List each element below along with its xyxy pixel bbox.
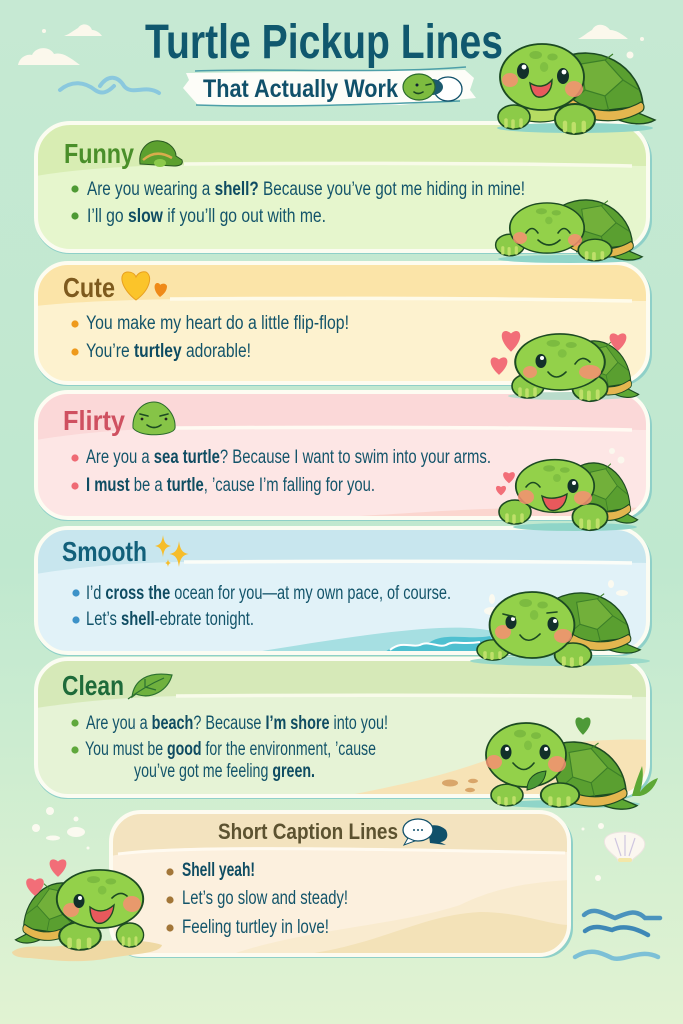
cute lines: [71, 313, 349, 362]
panel: funny: [35, 123, 652, 254]
turtle: cute, winking, with hearts: [491, 331, 639, 401]
panel: flirty: [35, 392, 652, 521]
turtle: smooth: [470, 580, 650, 667]
decorative clouds: [18, 24, 644, 65]
turtle: top happy: [497, 44, 655, 134]
funny lines: Are you wearing a shell? Because you’ve got me hiding in mine!: [87, 179, 525, 200]
short caption list: Feeling turtley in love!: [182, 917, 329, 938]
flirty lines: I must be a turtle, ’cause I’m falling for you.: [86, 475, 375, 496]
subtitle banner: That Actually Work: [203, 75, 398, 103]
heading: clean: Clean: [62, 670, 124, 701]
smooth lines: I’d cross the ocean for you—at my own pace, of course.: [86, 583, 451, 604]
decorative waves: [60, 78, 159, 93]
short caption list: Let’s go slow and steady!: [182, 888, 348, 909]
plant: [632, 766, 658, 796]
icon: small turtle with speech bubbles: [403, 74, 462, 101]
icon: seashell: [604, 832, 645, 862]
funny lines: I’ll go slow if you’ll go out with me.: [87, 206, 326, 227]
heart leaf: [575, 717, 591, 735]
funny lines: [71, 179, 525, 227]
cute lines: You’re turtley adorable!: [86, 341, 251, 362]
clean lines: you’ve got me feeling green.: [134, 761, 315, 782]
heading: funny: Funny: [64, 138, 134, 169]
heading: short caption lines: Short Caption Lines: [218, 819, 398, 844]
heading: cute: Cute: [63, 272, 115, 303]
turtle: flirty, winking: [496, 448, 638, 531]
panel: smooth: [35, 528, 652, 656]
clean lines: You must be good for the environment, ’cause: [85, 739, 376, 760]
icon: leaf: [128, 674, 172, 699]
small hearts: [496, 472, 515, 495]
cute lines: You make my heart do a little flip-flop!: [86, 313, 349, 334]
clean lines: Are you a beach? Because I’m shore into you!: [86, 713, 388, 734]
icon: speech bubbles: [403, 819, 447, 845]
panel: clean: [35, 659, 652, 799]
panel: cute: [35, 263, 652, 386]
hearts: [26, 859, 66, 896]
smooth lines: Let’s shell-ebrate tonight.: [86, 609, 254, 630]
heading: smooth: Smooth: [62, 536, 147, 567]
short caption list: [166, 860, 348, 938]
title: Turtle Pickup Lines: [145, 16, 503, 69]
icon: sparkles: [155, 535, 189, 567]
decorative dots and bubbles: [32, 807, 604, 881]
flirty lines: Are you a sea turtle? Because I want to swim into your arms.: [86, 447, 491, 468]
icon: hearts: [122, 272, 167, 300]
flirty lines: [71, 447, 491, 496]
short caption list: Shell yeah!: [182, 860, 255, 881]
smooth lines: [72, 583, 451, 630]
decorative right waves: [575, 911, 660, 959]
turtle: funny, eyes closed: [496, 200, 642, 263]
heading: flirty: Flirty: [63, 405, 125, 436]
icon: flirty face: [133, 402, 175, 435]
subtitle banner: [183, 67, 476, 106]
hearts: [491, 331, 626, 375]
icon: turtle shell: [140, 141, 182, 167]
panel: short caption lines: [111, 812, 573, 958]
turtle: clean, on the sand with leaf: [486, 717, 658, 809]
turtle: short captions, winking, facing right: [15, 859, 144, 950]
sand mound: [12, 940, 162, 961]
clean lines: [71, 713, 388, 782]
